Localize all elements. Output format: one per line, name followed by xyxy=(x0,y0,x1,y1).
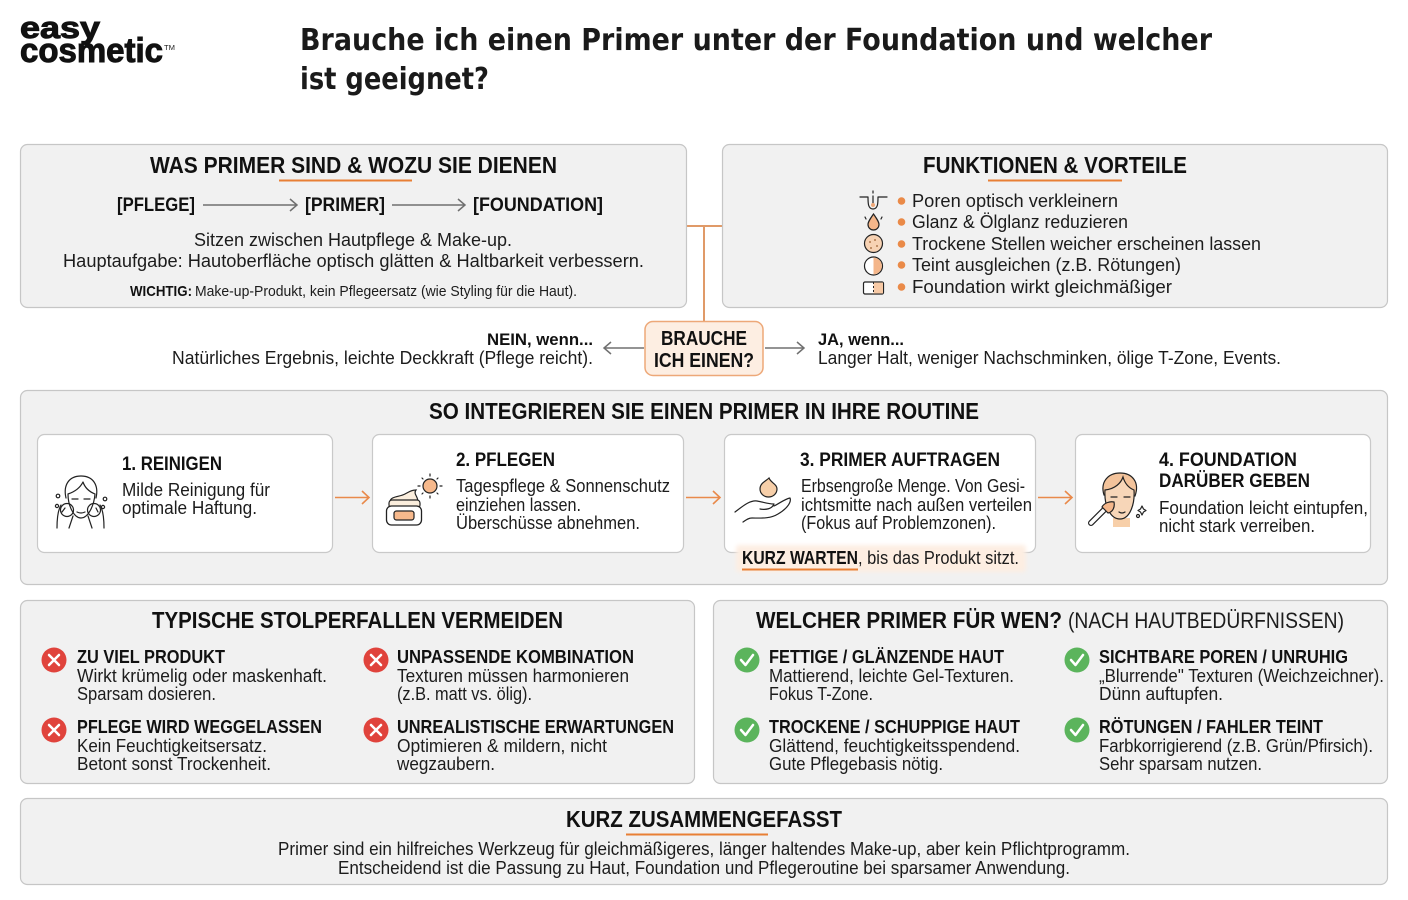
item: zu viel produkt: ZU VIEL PRODUKT xyxy=(77,647,225,667)
description: Sitzen zwischen Hautpflege & Make-up. xyxy=(194,230,512,250)
step 2: Tagespflege & Sonnenschutz xyxy=(456,476,670,496)
step 1: 1. REINIGEN xyxy=(122,454,222,475)
logo: easycosmetic xyxy=(20,10,175,70)
item: unrealistische erwartungen xyxy=(364,717,674,774)
text: ja: JA, wenn... xyxy=(818,330,904,349)
heading: WAS PRIMER SIND & WOZU SIE DIENEN xyxy=(150,152,557,178)
flow diagram: Pflege to Primer to Foundation: [PFLEGE] xyxy=(117,195,195,216)
step 3: 3. PRIMER AUFTRAGEN xyxy=(800,450,1000,471)
panel: stolperfallen xyxy=(20,600,694,784)
arrow: nein xyxy=(604,342,644,354)
step 2: 2. PFLEGEN xyxy=(456,450,555,471)
logo: easycosmetic: easy xyxy=(20,10,101,45)
step 3: ichtsmitte nach außen verteilen xyxy=(801,495,1032,515)
arrow 3 xyxy=(1038,491,1072,504)
item: roetungen: RÖTUNGEN / FAHLER TEINT xyxy=(1099,717,1323,737)
icon: even tone xyxy=(864,257,882,275)
icon: hand with primer drop xyxy=(735,478,790,522)
heading: WELCHER PRIMER FÜR WEN? xyxy=(756,607,1062,633)
flow diagram: Pflege to Primer to Foundation: [FOUNDATION] xyxy=(473,195,603,216)
item: pflege weggelassen: PFLEGE WIRD WEGGELASSEN xyxy=(77,717,322,737)
step 3: (Fokus auf Problemzonen). xyxy=(801,513,996,533)
item: trockene haut: TROCKENE / SCHUPPIGE HAUT xyxy=(769,717,1020,737)
connector from panels to decision box xyxy=(686,226,722,322)
icon: face cleansing xyxy=(55,476,107,528)
step 4: DARÜBER GEBEN xyxy=(1159,471,1310,492)
item: unrealistische erwartungen: Optimieren & mildern, nicht xyxy=(397,736,607,756)
text: nein: Natürliches Ergebnis, leichte Deckkraft (Pflege reicht). xyxy=(172,348,593,368)
step 4: nicht stark verreiben. xyxy=(1159,516,1315,536)
decision box: ICH EINEN? xyxy=(654,350,754,372)
heading: FUNKTIONEN & VORTEILE xyxy=(923,152,1187,178)
item: roetungen: Farbkorrigierend (z.B. Grün/Pfirsich). xyxy=(1099,736,1373,756)
icon: cream jar and sun xyxy=(386,474,442,525)
item: fettige haut: FETTIGE / GLÄNZENDE HAUT xyxy=(769,647,1004,667)
decision box: BRAUCHE xyxy=(661,328,747,350)
item: unpassende kombination: UNPASSENDE KOMBINATION xyxy=(397,647,634,667)
panel: welcher primer fuer wen xyxy=(714,600,1388,784)
panel: funktionen und vorteile xyxy=(722,144,1388,308)
item: trockene haut xyxy=(734,717,1020,774)
item: sichtbare poren xyxy=(1064,647,1384,704)
bullet list: Glanz & Ölglanz reduzieren xyxy=(912,212,1128,232)
step 4 xyxy=(1076,434,1370,552)
item: unrealistische erwartungen: wegzaubern. xyxy=(396,754,495,774)
heading: (NACH HAUTBEDÜRFNISSEN) xyxy=(1068,608,1344,633)
callout: kurz warten: KURZ WARTEN xyxy=(742,548,858,568)
note: WICHTIG: xyxy=(130,283,192,300)
title: ist geeignet? xyxy=(300,62,489,97)
note: Make-up-Produkt, kein Pflegeersatz (wie Styling für die Haut). xyxy=(195,283,577,300)
bullet list: Trockene Stellen weicher erscheinen lassen xyxy=(912,234,1261,254)
summary text: Entscheidend ist die Passung zu Haut, Foundation und Pflegeroutine bei sparsamer Anwendung. xyxy=(338,858,1070,878)
bullet list: Foundation wirkt gleichmäßiger xyxy=(912,277,1172,297)
heading: TYPISCHE STOLPERFALLEN VERMEIDEN xyxy=(152,607,563,633)
step 4: 4. FOUNDATION xyxy=(1159,450,1297,471)
item: zu viel produkt: Wirkt krümelig oder maskenhaft. xyxy=(77,666,327,686)
item: trockene haut: Gute Pflegebasis nötig. xyxy=(769,754,943,774)
item: roetungen xyxy=(1064,717,1373,774)
heading xyxy=(756,607,1344,633)
item: zu viel produkt: Sparsam dosieren. xyxy=(77,684,216,704)
item: fettige haut xyxy=(734,647,1014,704)
panel: routine xyxy=(20,390,1388,584)
flow diagram: Pflege to Primer to Foundation xyxy=(117,195,603,216)
callout: kurz warten: , bis das Produkt sitzt. xyxy=(858,548,1019,568)
heading: SO INTEGRIEREN SIE EINEN PRIMER IN IHRE ROUTINE xyxy=(429,398,979,424)
title: Brauche ich einen Primer unter der Foundation und welcher xyxy=(300,23,1212,58)
summary text xyxy=(278,839,1130,878)
item: pflege weggelassen: Betont sonst Trockenheit. xyxy=(77,754,271,774)
step 3 xyxy=(724,434,1036,552)
heading: KURZ ZUSAMMENGEFASST xyxy=(566,806,842,832)
description xyxy=(63,230,644,271)
item: fettige haut: Mattierend, leichte Gel-Texturen. xyxy=(769,666,1014,686)
step 1: optimale Haftung. xyxy=(122,498,257,518)
text: ja: Langer Halt, weniger Nachschminken, ölige T-Zone, Events. xyxy=(818,348,1281,368)
item: unpassende kombination: (z.B. matt vs. ölig). xyxy=(397,684,532,704)
item: pflege weggelassen xyxy=(42,717,322,774)
step 2 xyxy=(372,434,684,552)
bullet list xyxy=(898,191,1261,297)
arrow: ja xyxy=(765,342,804,354)
icon: dry skin xyxy=(864,234,882,252)
step 1: Milde Reinigung für xyxy=(122,480,270,500)
text: ja xyxy=(818,330,1281,368)
step 2: einziehen lassen. xyxy=(456,495,581,515)
logo: easycosmetic: cosmetic xyxy=(20,32,163,70)
item: unrealistische erwartungen: UNREALISTISCHE ERWARTUNGEN xyxy=(397,717,674,737)
item: unpassende kombination: Texturen müssen harmonieren xyxy=(397,666,629,686)
item: pflege weggelassen: Kein Feuchtigkeitsersatz. xyxy=(77,736,267,756)
summary text: Primer sind ein hilfreiches Werkzeug für gleichmäßigeres, länger haltendes Make-up, aber kein Pflichtprogramm. xyxy=(278,839,1130,859)
step 4: Foundation leicht eintupfen, xyxy=(1159,498,1368,518)
icon: oil drop xyxy=(865,214,882,230)
icon: pore xyxy=(860,191,887,209)
item: roetungen: Sehr sparsam nutzen. xyxy=(1099,754,1262,774)
item: sichtbare poren: Dünn auftupfen. xyxy=(1099,684,1223,704)
step 2: Überschüsse abnehmen. xyxy=(456,513,640,533)
icon: even foundation xyxy=(864,282,884,294)
decision box xyxy=(645,322,763,376)
panel: was primer sind xyxy=(20,144,686,308)
title xyxy=(300,23,1212,97)
callout: kurz warten xyxy=(736,545,1026,572)
item: sichtbare poren: SICHTBARE POREN / UNRUHIG xyxy=(1099,647,1348,667)
item: trockene haut: Glättend, feuchtigkeitsspendend. xyxy=(769,736,1020,756)
item: unpassende kombination xyxy=(364,647,634,704)
text: nein xyxy=(172,330,593,368)
panel: kurz zusammengefasst xyxy=(20,798,1388,884)
item: sichtbare poren: „Blurrende" Texturen (Weichzeichner). xyxy=(1099,666,1384,686)
item: fettige haut: Fokus T-Zone. xyxy=(769,684,873,704)
step 3: Erbsengroße Menge. Von Gesi- xyxy=(801,476,1025,496)
item: zu viel produkt xyxy=(42,647,327,704)
step 1 xyxy=(38,434,332,552)
arrow 1 xyxy=(335,491,369,504)
bullet list: Poren optisch verkleinern xyxy=(912,191,1118,211)
description: Hauptaufgabe: Hautoberfläche optisch glätten & Haltbarkeit verbessern. xyxy=(63,251,644,271)
arrow 2 xyxy=(686,491,720,504)
logo: easycosmetic: TM xyxy=(164,45,175,52)
flow diagram: Pflege to Primer to Foundation: [PRIMER] xyxy=(305,195,385,216)
icon: face with foundation brush xyxy=(1091,473,1146,527)
text: nein: NEIN, wenn... xyxy=(487,330,593,349)
bullet list: Teint ausgleichen (z.B. Rötungen) xyxy=(912,255,1181,275)
